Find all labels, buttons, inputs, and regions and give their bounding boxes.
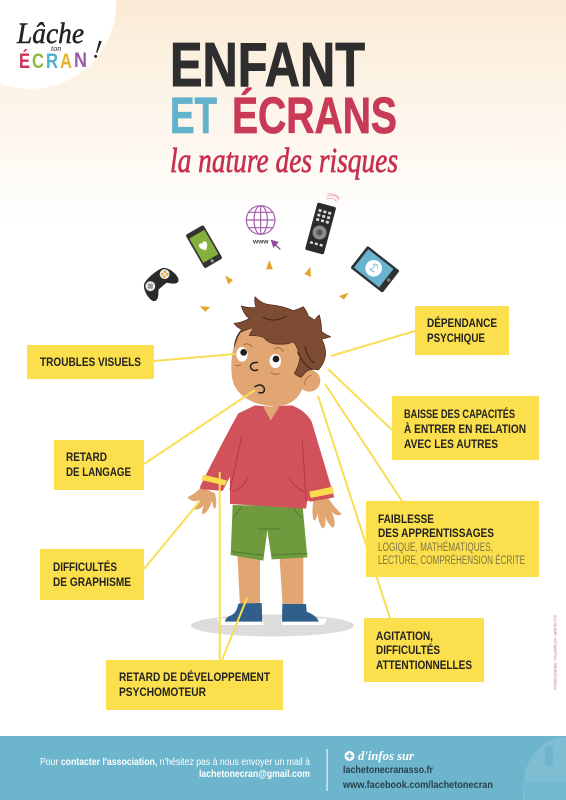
callout: baisse des capacites — [392, 396, 539, 460]
child — [187, 297, 342, 625]
more info — [342, 748, 493, 791]
nose and mouth — [250, 362, 264, 393]
legs — [237, 553, 303, 607]
callout: dependance psychique — [415, 306, 509, 355]
shadow under child — [191, 614, 354, 636]
callout: agitation: ATTENTIONNELLES — [376, 658, 472, 672]
logo: Lâche — [16, 17, 84, 50]
logo: A — [60, 50, 72, 73]
callout: dependance psychique: PSYCHIQUE — [427, 331, 485, 345]
credit text: conception graphique : www.grinette.com - septembre 2018 — [552, 615, 558, 690]
callout: faiblesse des apprentissages: DES APPRENTISSAGES — [378, 526, 494, 540]
more info: d'infos sur — [358, 748, 415, 763]
callout: difficultes de graphisme: DE GRAPHISME — [53, 575, 131, 589]
title: ENFANT — [170, 31, 365, 100]
cuffs — [201, 475, 334, 498]
contact text: lachetonecran@gmail.com — [199, 769, 310, 780]
footer smiley — [523, 737, 566, 800]
footer — [0, 736, 566, 800]
sweater — [200, 405, 334, 509]
devices — [139, 194, 400, 312]
callout: retard de developpement: RETARD DE DÉVELOPPEMENT — [119, 669, 270, 684]
logo: ton — [51, 44, 61, 53]
shoes — [217, 603, 327, 625]
callout: difficultes de graphisme: DIFFICULTÉS — [53, 559, 117, 574]
ear — [298, 370, 320, 392]
callout: baisse des capacites: AVEC LES AUTRES — [404, 437, 498, 451]
callout: baisse des capacites: À ENTRER EN RELATION — [404, 421, 526, 436]
logo: C — [32, 50, 44, 73]
title — [170, 31, 397, 144]
callout: retard de developpement: PSYCHOMOTEUR — [119, 685, 206, 699]
callout: agitation: AGITATION, — [376, 629, 433, 643]
callout: baisse des capacites: BAISSE DES CAPACITÉS — [404, 406, 515, 421]
callout: retard de langage: DE LANGAGE — [66, 465, 131, 479]
callout: agitation: DIFFICULTÉS — [376, 642, 440, 657]
title: ET — [170, 87, 217, 144]
arrows: orange triangles — [200, 260, 349, 312]
callout: faiblesse des apprentissages: FAIBLESSE — [378, 512, 434, 526]
callout: faiblesse des apprentissages: LOGIQUE, MATHÉMATIQUES, — [378, 541, 493, 554]
logo: É — [19, 50, 30, 73]
more info: lachetonecranasso.fr — [343, 764, 433, 776]
eyes — [235, 344, 283, 374]
callout: troubles visuels — [27, 345, 154, 379]
more info: www.facebook.com/lachetonecran — [342, 779, 493, 791]
contact text: Pour contacter l'association, n'hésitez pas à nous envoyer un mail à — [40, 757, 310, 768]
hands — [187, 487, 216, 514]
icon: smartphone — [185, 225, 223, 269]
icon: tablet — [350, 246, 400, 293]
shorts — [231, 505, 307, 561]
logo: N — [74, 49, 87, 72]
callout: troubles visuels: TROUBLES VISUELS — [40, 355, 141, 369]
neck — [263, 407, 279, 421]
logo — [0, 0, 116, 89]
callout: dependance psychique: DÉPENDANCE — [427, 315, 497, 330]
callout: faiblesse des apprentissages — [366, 501, 539, 577]
logo: ! — [91, 34, 104, 64]
icon: globe www — [246, 206, 280, 249]
callout: agitation — [364, 618, 484, 682]
icon: globe www: www — [252, 238, 269, 245]
title: ÉCRANS — [232, 87, 397, 144]
icon: game controller — [139, 263, 180, 303]
connector lines — [144, 331, 415, 660]
icon: remote control — [305, 194, 339, 255]
subtitle: la nature des risques — [170, 141, 398, 180]
hair — [234, 297, 331, 377]
head — [231, 323, 313, 406]
callout: retard de developpement — [106, 660, 283, 710]
callout: difficultes de graphisme — [40, 549, 144, 600]
callout: retard de langage — [54, 440, 144, 490]
logo: R — [46, 50, 58, 73]
contact text — [40, 757, 310, 780]
callout: retard de langage: RETARD — [66, 450, 107, 464]
